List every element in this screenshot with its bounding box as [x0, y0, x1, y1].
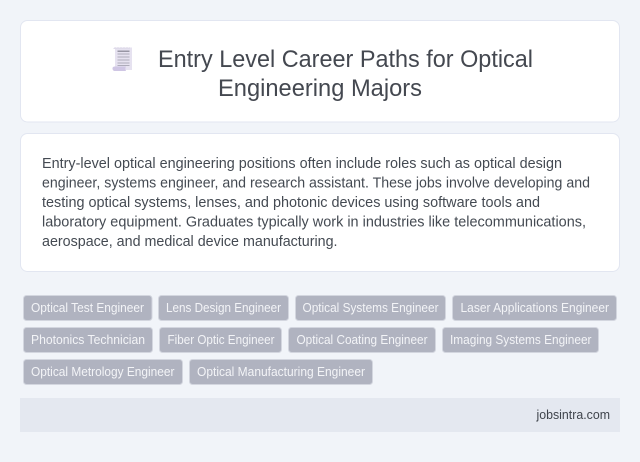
tag: Optical Test Engineer: Optical Test Engineer: [31, 301, 144, 315]
tag: Laser Applications Engineer: Laser Applications Engineer: [460, 301, 609, 315]
tag: Lens Design Engineer: Lens Design Engineer: [166, 301, 281, 315]
tag: Fiber Optic Engineer: [160, 328, 282, 352]
description text: aerospace, and medical device manufacturing.: [42, 234, 338, 250]
title: [158, 46, 533, 102]
tag: Optical Coating Engineer: Optical Coating Engineer: [296, 333, 428, 347]
tag: Imaging Systems Engineer: Imaging Systems Engineer: [450, 333, 592, 347]
description text: [42, 156, 590, 250]
tag: Photonics Technician: [24, 328, 152, 352]
tag: Optical Test Engineer: [24, 296, 152, 320]
tag: Optical Manufacturing Engineer: Optical Manufacturing Engineer: [197, 365, 365, 379]
tag: Laser Applications Engineer: [452, 296, 616, 320]
footer source text: jobsintra.com: [536, 408, 610, 422]
icon: document scroll: [112, 47, 132, 71]
description text: Entry-level optical engineering positions often include roles such as optical design: [42, 156, 562, 172]
tag: Optical Manufacturing Engineer: [190, 360, 372, 384]
tag: Optical Metrology Engineer: [24, 360, 182, 384]
description text: testing optical systems, lenses, and photonic devices using software tools and: [42, 195, 540, 211]
tag: Optical Systems Engineer: Optical Systems Engineer: [302, 301, 438, 315]
tag: Optical Coating Engineer: [288, 328, 436, 352]
description text: laboratory equipment. Graduates typically work in industries like telecommunications,: [42, 214, 586, 230]
tag list: career paths: [24, 296, 616, 384]
description text: engineer, systems engineer, and research assistant. These jobs involve developing and: [42, 176, 590, 192]
footer: [20, 398, 620, 432]
tag: Imaging Systems Engineer: [442, 328, 598, 352]
tag: Optical Metrology Engineer: Optical Metrology Engineer: [31, 365, 174, 379]
tag: Lens Design Engineer: [158, 296, 288, 320]
tag: Photonics Technician: Photonics Technician: [31, 333, 145, 347]
title: Engineering Majors: [218, 75, 422, 102]
panel: header: [20, 20, 620, 122]
panel: description: [20, 134, 620, 272]
tag: Fiber Optic Engineer: Fiber Optic Engineer: [168, 333, 274, 347]
tag: Optical Systems Engineer: [296, 296, 446, 320]
title: Entry Level Career Paths for Optical: [158, 46, 533, 73]
